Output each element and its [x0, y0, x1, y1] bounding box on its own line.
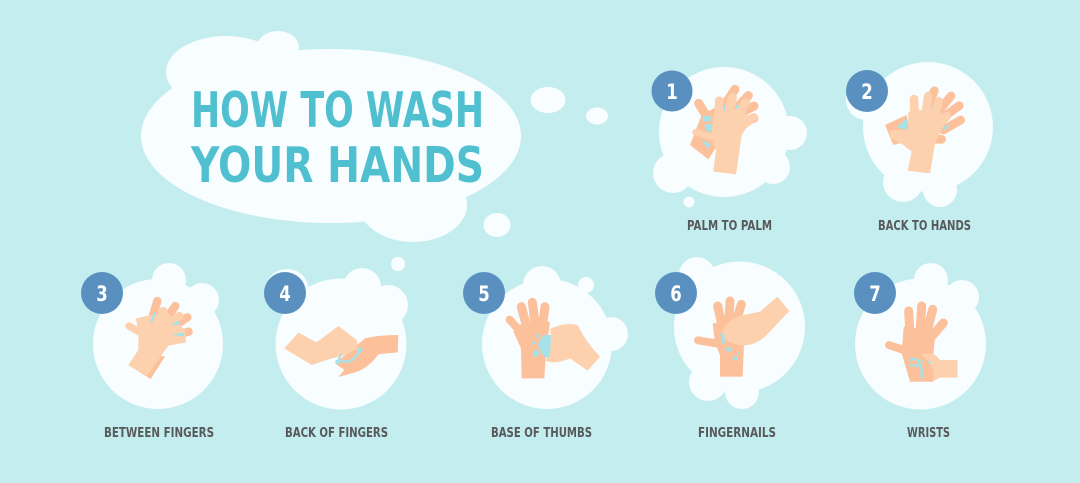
panel: step 4 back of fingers [264, 257, 408, 441]
panel: step 5 base of thumbs [463, 266, 628, 441]
foam cloud 6 [674, 257, 805, 409]
label: BACK TO HANDS [878, 219, 971, 234]
icon: gripping wrist [889, 306, 958, 382]
number badge 6 [655, 272, 697, 314]
label: WRISTS [907, 426, 950, 441]
panel: step 7 wrists [854, 263, 986, 441]
number badge 7 [854, 272, 896, 314]
icon: cleaning fingernails [698, 297, 789, 377]
title [190, 82, 484, 194]
icon: interlaced fingers [128, 301, 189, 379]
panel: step 3 between fingers [81, 263, 223, 441]
foam cloud 3 [93, 263, 223, 409]
foam cloud 2 [846, 62, 993, 207]
number badge 2: 2 [861, 80, 873, 104]
label: BACK OF FINGERS [285, 426, 388, 441]
foam cloud 1 [653, 67, 807, 208]
title: HOW TO WASH [191, 82, 484, 139]
number badge 4: 4 [279, 282, 291, 306]
icon: rubbing thumb base [510, 302, 600, 378]
label: PALM TO PALM [687, 219, 772, 234]
number badge 2 [846, 70, 888, 112]
small bubbles near title [484, 87, 608, 237]
number badge 6: 6 [670, 282, 682, 306]
number badge 4 [264, 272, 306, 314]
panel: step 2 back to hands [846, 62, 993, 234]
label: BETWEEN FINGERS [104, 426, 214, 441]
foam cloud 4 [265, 257, 408, 410]
label: FINGERNAILS [698, 426, 776, 441]
title bubble [141, 31, 521, 242]
foam cloud 7 [855, 263, 986, 410]
number badge 3: 3 [96, 282, 108, 306]
foam cloud 5 [482, 266, 628, 409]
number badge 1 [652, 70, 692, 112]
panel: step 6 fingernails [655, 257, 805, 441]
number badge 5 [463, 272, 505, 314]
panel: step 1 palm to palm [652, 67, 807, 234]
icon: hand cupping fingers [284, 326, 398, 377]
number badge 5: 5 [478, 282, 490, 306]
number badge 3 [81, 272, 123, 314]
icon: hands palm to palm [690, 89, 754, 174]
number badge 1: 1 [666, 80, 678, 104]
icon: back of hands [885, 91, 961, 173]
label: BASE OF THUMBS [491, 426, 592, 441]
title: YOUR HANDS [190, 137, 484, 194]
number badge 7: 7 [869, 282, 881, 306]
